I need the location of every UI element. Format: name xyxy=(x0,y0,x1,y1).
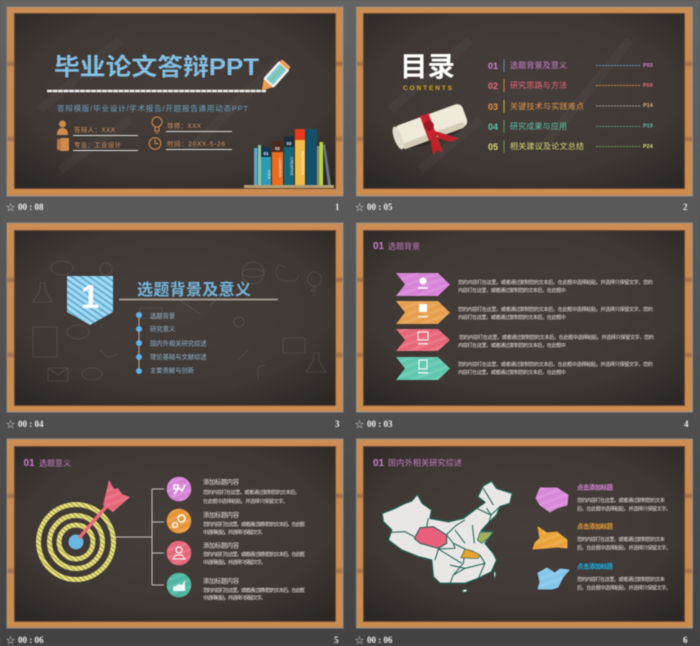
legend 3: 点击添加标题 xyxy=(577,562,614,570)
info: presenter xyxy=(73,125,138,136)
list item 4: P19 xyxy=(643,124,653,130)
info: tutor: 导师：XXX xyxy=(167,121,202,130)
list item 5: 相关建议及论文总结 xyxy=(510,141,584,151)
timeline: 理论基础与文献综述 xyxy=(150,352,207,361)
icon: clock xyxy=(149,138,161,149)
footer: slide 6: 6 xyxy=(683,635,688,645)
text 2: 内容打在这里，或者通过复制您的文本后，在此框中 xyxy=(458,313,566,321)
timeline: 国内外相关研究综述 xyxy=(150,338,207,348)
footer: slide 4: 4 xyxy=(684,419,689,429)
item 2 xyxy=(167,509,305,536)
ribbon 3 xyxy=(396,329,450,351)
footer: slide 6: ☆ xyxy=(355,636,364,646)
footer: slide 3: ☆ xyxy=(6,420,15,430)
footer: slide 4: 00 : 03 xyxy=(367,419,393,429)
footer: slide 1: ☆ xyxy=(6,202,15,212)
slide 1 wooden frame xyxy=(6,6,344,196)
footer: slide 2: 2 xyxy=(683,202,688,212)
info: major: 专业：工业设计 xyxy=(74,140,122,149)
list item 3: P14 xyxy=(643,103,654,109)
section shield: 1 xyxy=(81,278,99,315)
title rule xyxy=(119,298,278,300)
info: date xyxy=(166,139,232,150)
books on shelf: CREATIVE xyxy=(290,157,294,176)
heading: 选题意义 xyxy=(39,458,71,468)
text 1: 内容打在这里，或者通过复制您的文本后，在此框中 xyxy=(458,286,566,294)
panel: slide 3 section xyxy=(6,222,344,412)
panel: slide 1 cover xyxy=(6,6,344,196)
list item 3: 关键技术与实践难点 xyxy=(510,101,584,111)
item 3: 添加标题内容 xyxy=(203,540,240,550)
footer: slide 5: ☆ xyxy=(6,636,15,646)
list item 5: P24 xyxy=(643,144,654,150)
chalk doodles xyxy=(33,261,326,381)
item 1: 您的内容打在这里，或者通过复制您的文本后， xyxy=(203,488,300,496)
legend 1: 点击添加标题 xyxy=(577,482,614,492)
text 2 xyxy=(458,305,653,321)
heading: 01 xyxy=(373,241,385,252)
timeline: 研究意义 xyxy=(150,324,176,333)
text 3 xyxy=(458,333,654,349)
list item 1 xyxy=(488,59,653,72)
item 1: 添加标题内容 xyxy=(203,477,240,486)
info: major xyxy=(73,140,138,150)
footer: slide 2 xyxy=(355,202,688,212)
text 3: 内容打在这里，或者通过复制您的文本后，在此框中 xyxy=(458,341,566,349)
heading xyxy=(373,241,420,252)
footer: slide 3 xyxy=(6,419,340,430)
slide 3 wooden frame xyxy=(6,222,344,412)
list item 5 xyxy=(488,140,654,153)
footer: slide 5: 5 xyxy=(334,635,339,645)
legend 1 xyxy=(536,482,671,512)
books on shelf: 01 xyxy=(263,151,269,156)
icon: light bulb xyxy=(152,117,162,133)
list item 1: P03 xyxy=(643,63,653,69)
list item 3 xyxy=(488,100,654,113)
subtitle: 答辩模版/毕业设计/学术报告/开题报告通用动态PPT xyxy=(57,103,248,113)
legend 2: 后，在此框中选择粘贴，并选择只保留文字。 xyxy=(577,544,671,552)
chalk underline xyxy=(47,90,266,92)
item 3 xyxy=(167,540,305,566)
text 4: 内容打在这里，或者通过复制您的文本后，在此框中 xyxy=(458,368,566,376)
footer: slide 3: 00 : 04 xyxy=(18,419,44,429)
text 4: 您的内容打在这里，或者通过复制您的文本后，在此框中选择粘贴，并选择只保留文字，您的 xyxy=(458,360,653,368)
info: tutor xyxy=(166,121,232,132)
item 1: 在此框中选择粘贴，并选择只保留文字。 xyxy=(203,497,288,505)
panel: slide 5 significance xyxy=(6,438,344,628)
list item 4: 研究成果与应用 xyxy=(510,121,567,131)
item 4: 中选择粘贴，并选择只保留文字。 xyxy=(203,594,266,602)
subheading: CONTENTS: CONTENTS xyxy=(403,85,453,92)
item 4: 添加标题内容 xyxy=(203,576,240,585)
legend 3: 后，在此框中选择粘贴，并选择只保留文字。 xyxy=(577,584,671,592)
dart xyxy=(79,480,130,538)
heading xyxy=(24,458,71,469)
list item 2: 02 xyxy=(488,81,498,91)
list item 5: 05 xyxy=(488,142,498,152)
info: presenter: 答辩人：XXX xyxy=(74,125,116,134)
legend 1: 后，在此框中选择粘贴，并选择只保留文字。 xyxy=(577,504,671,512)
books on shelf: 03 xyxy=(286,141,292,146)
item 4: 您的内容打在这里，或者通过复制您的文本后，在此框 xyxy=(203,586,305,594)
item 2: 您的内容打在这里，或者通过复制您的文本后，在此框 xyxy=(203,520,305,528)
section shield xyxy=(67,276,113,325)
legend 3: 您的内容打在这里，或者通过复制您的文本 xyxy=(577,575,665,583)
heading xyxy=(373,458,462,469)
legend 2: 点击添加标题 xyxy=(577,522,614,530)
shelf xyxy=(244,185,334,188)
books on shelf: INSPIRATION xyxy=(300,151,304,175)
heading: 01 xyxy=(373,458,385,469)
text 2: 您的内容打在这里，或者通过复制您的文本后，在此框中选择粘贴，并选择只保留文字，您的 xyxy=(458,305,653,313)
footer: slide 4: ☆ xyxy=(355,420,364,430)
list item 1: 01 xyxy=(488,61,498,71)
title: 毕业论文答辩PPT xyxy=(54,53,259,81)
timeline: 选题背景 xyxy=(150,311,175,320)
heading: 选题背景 xyxy=(388,241,420,251)
item 2: 添加标题内容 xyxy=(203,510,240,519)
heading: 01 xyxy=(24,458,35,469)
section title: 选题背景及意义 xyxy=(137,280,251,299)
text 1 xyxy=(458,278,653,294)
icon: person xyxy=(57,120,68,135)
list item 4 xyxy=(488,120,653,133)
item 3: 中选择粘贴，并选择只保留文字。 xyxy=(203,558,266,566)
footer: slide 6: 00 : 06 xyxy=(367,635,393,645)
list item 3: 03 xyxy=(488,102,498,112)
legend 1: 您的内容打在这里，或者通过复制您的文本 xyxy=(577,496,665,504)
icon: folder xyxy=(57,138,69,151)
list item 1: 选题背景及意义 xyxy=(510,60,567,70)
text 3: 您的内容打在这里，或者通过复制您的文本后，在此框中选择粘贴，并选择只保留文字，您的 xyxy=(459,333,654,341)
chalk smudges xyxy=(40,40,280,170)
footer: slide 1 xyxy=(6,202,340,212)
ribbon 2 xyxy=(396,301,450,324)
list item 2: P09 xyxy=(643,83,653,89)
list item 2: 研究思路与方法 xyxy=(510,80,567,90)
books on shelf: IDEA xyxy=(267,170,271,179)
item 2: 中选择粘贴，并选择只保留文字。 xyxy=(203,528,266,536)
legend 3 xyxy=(538,562,671,592)
footer: slide 5 xyxy=(6,635,339,646)
connector lines xyxy=(115,489,164,585)
slide 2 wooden frame xyxy=(356,6,693,196)
panel: slide 2 contents xyxy=(356,6,693,196)
books on shelf: LEARNING xyxy=(278,158,282,177)
legend 2 xyxy=(533,522,671,552)
icon: diploma scroll xyxy=(390,101,475,167)
info: date: 时间：20XX-5-26 xyxy=(167,139,225,148)
panel: slide 4 background xyxy=(356,222,693,412)
heading: 国内外相关研究综述 xyxy=(388,458,462,468)
item 1 xyxy=(167,477,300,505)
heading: contents: 目录 xyxy=(400,51,455,82)
item 4 xyxy=(167,573,305,602)
text 4 xyxy=(458,360,653,376)
footer: slide 1: 1 xyxy=(335,202,340,212)
books on shelf: 02 xyxy=(275,146,280,151)
list item 2 xyxy=(488,79,653,92)
chalk smudges xyxy=(390,40,630,170)
footer: slide 2: 00 : 05 xyxy=(367,202,393,212)
books on shelf xyxy=(254,129,331,185)
legend 2: 您的内容打在这里，或者通过复制您的文本 xyxy=(577,535,665,543)
slide 4 wooden frame xyxy=(356,222,693,412)
target xyxy=(38,504,114,580)
footer: slide 4 xyxy=(355,419,689,430)
icon: pencil xyxy=(256,59,292,95)
footer: slide 6 xyxy=(355,635,688,646)
timeline: 主要贡献与创新 xyxy=(150,366,195,374)
item 3: 您的内容打在这里，或者通过复制您的文本后，在此框 xyxy=(203,550,305,558)
slide 5 wooden frame xyxy=(6,438,344,628)
footer: slide 1: 00 : 08 xyxy=(18,202,44,212)
ribbon 1 xyxy=(396,273,450,296)
footer: slide 2: ☆ xyxy=(355,202,364,212)
footer: slide 3: 3 xyxy=(335,419,340,429)
panel: slide 6 literature map xyxy=(356,438,693,628)
ribbon 4 xyxy=(396,357,450,380)
list item 4: 04 xyxy=(488,122,498,132)
timeline xyxy=(136,311,207,374)
text 1: 您的内容打在这里，或者通过复制您的文本后，在此框中选择粘贴，并选择只保留文字，您的 xyxy=(458,278,653,286)
footer: slide 5: 00 : 06 xyxy=(18,635,44,645)
map of China xyxy=(382,481,512,592)
slide 6 wooden frame xyxy=(356,438,693,628)
